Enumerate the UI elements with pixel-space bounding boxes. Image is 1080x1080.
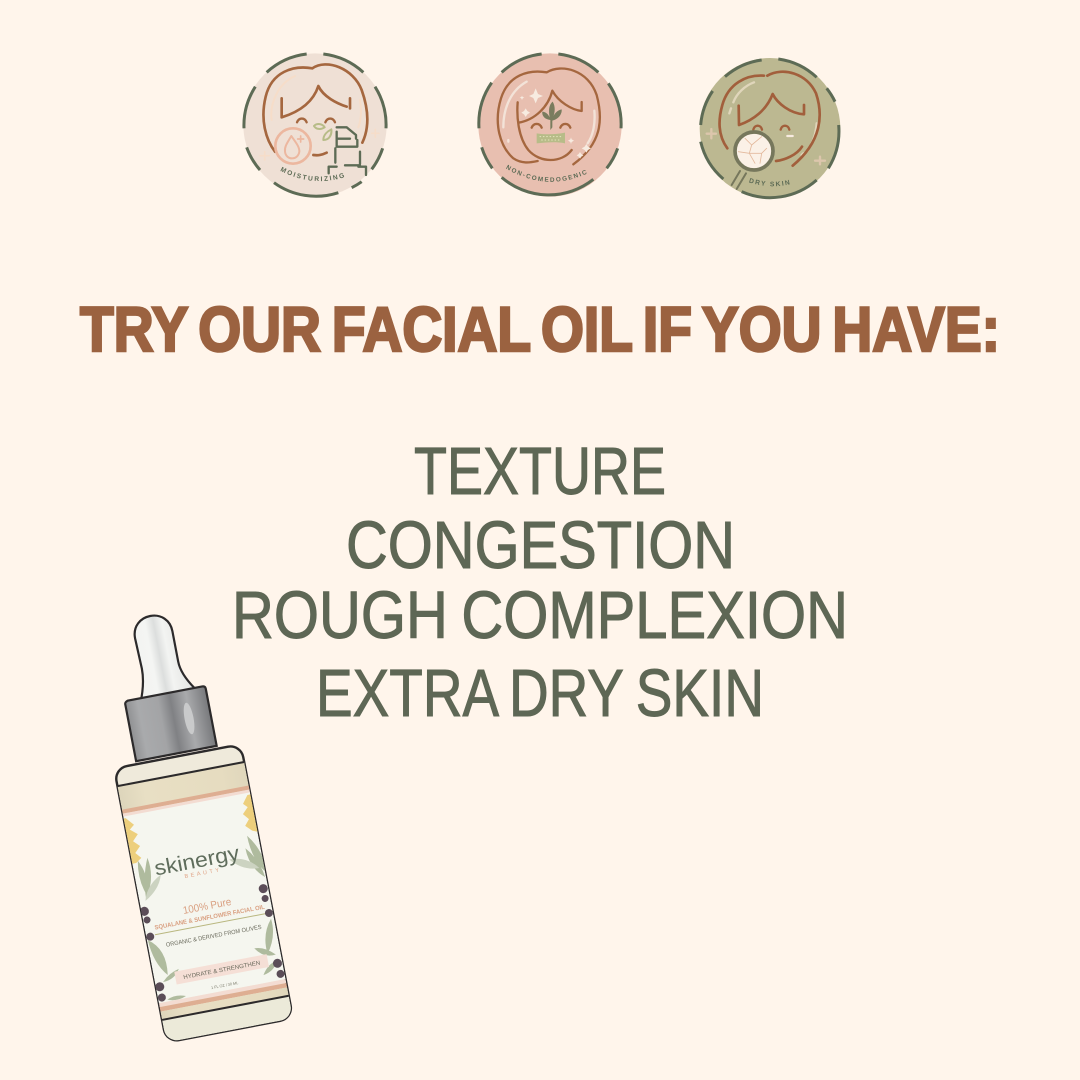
- bottle body: [114, 744, 293, 1043]
- icon: non-comedogenic badge: [477, 52, 623, 197]
- olive leaves left: [138, 858, 186, 1000]
- volume: 1 FL OZ / 30 ML: [211, 981, 239, 990]
- benefit tag: [174, 954, 269, 985]
- item: rough complexion: ROUGH COMPLEXION: [232, 578, 848, 653]
- dropper collar: [125, 686, 217, 761]
- list of skin concerns: [232, 434, 848, 731]
- lower stripes: [159, 979, 286, 1007]
- product bottle: SQUALANE & SUNFLOWER FACIAL OIL: [154, 904, 266, 932]
- white label: [123, 792, 286, 1003]
- olive leaves right: [246, 836, 276, 975]
- product name: 100% Pure: [182, 896, 232, 917]
- label: moisturizing: MOISTURIZING: [280, 166, 344, 182]
- item: texture: TEXTURE: [414, 434, 666, 509]
- top tan band: [117, 762, 250, 817]
- label: non-comedogenic: NON-COMEDOGENIC: [506, 164, 587, 182]
- product bottle: [115, 614, 292, 1042]
- sparkles: [520, 88, 591, 159]
- berries: [139, 883, 285, 1003]
- item: extra dry skin: EXTRA DRY SKIN: [316, 656, 764, 731]
- band separator lines: [117, 762, 289, 1020]
- brand name: skinergy: [153, 842, 242, 880]
- magnifying glass: [732, 171, 746, 189]
- label: dry skin: DRY SKIN: [749, 178, 790, 186]
- plant: [542, 102, 562, 130]
- brand subtitle: BEAUTY: [184, 868, 220, 880]
- icon: moisturizing badge: [242, 52, 388, 198]
- item: congestion: CONGESTION: [346, 508, 735, 583]
- dropper bulb: [125, 610, 195, 703]
- yellow leaves: [124, 794, 259, 864]
- product claim: ORGANIC & DERIVED FROM OLIVES: [166, 925, 262, 949]
- icon: dry skin badge: [699, 58, 840, 200]
- benefit tag: HYDRATE & STRENGTHEN: [183, 961, 261, 981]
